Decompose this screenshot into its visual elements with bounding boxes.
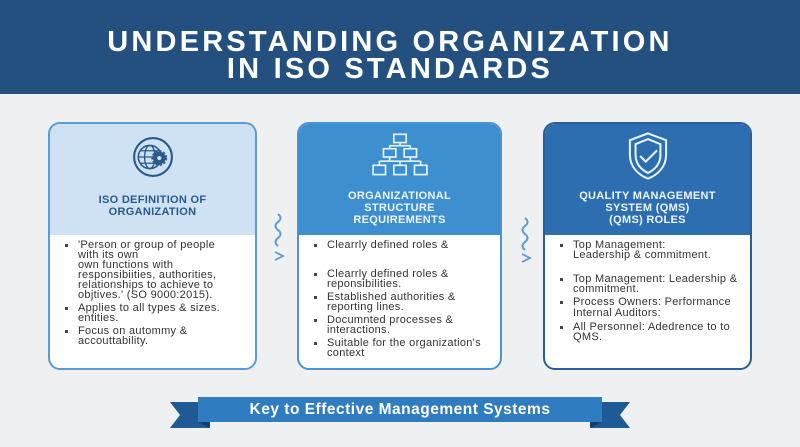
bullet list: structure: Established authorities & reporting lines. xyxy=(327,291,456,313)
bullet list: ISO definition: 'Person or group of people xyxy=(78,239,215,251)
icon: globe with gear xyxy=(133,137,173,177)
title xyxy=(107,26,673,85)
icon: org chart xyxy=(372,133,428,176)
header band xyxy=(0,0,800,94)
panel title: structure: REQUIREMENTS xyxy=(353,214,446,226)
panel: QMS roles xyxy=(543,122,752,370)
bullet list: structure: Clearrly defined roles & reponsibilities. xyxy=(327,268,449,290)
bullet list: QMS xyxy=(560,239,737,343)
bullet list: ISO definition xyxy=(65,239,220,347)
panel title: QMS: (QMS) ROLES xyxy=(609,214,686,226)
panel title: structure xyxy=(348,190,451,226)
bullet list: QMS: Process Owners: Performance xyxy=(573,296,731,308)
bullet list: QMS: All Personnel: Adedrence to to QMS. xyxy=(573,321,730,343)
panel: ISO definition xyxy=(48,122,257,370)
banner: key to effective management systems xyxy=(170,397,630,428)
bullet list: ISO definition: with its own xyxy=(78,249,138,261)
panel header: QMS xyxy=(545,124,750,235)
panel title: QMS: QUALITY MANAGEMENT xyxy=(579,190,716,202)
title: UNDERSTANDING ORGANIZATION xyxy=(107,26,673,58)
bullet list: structure: Documnted processes & interactions. xyxy=(327,314,453,336)
panel title: structure: STRUCTURE xyxy=(364,202,435,214)
panel title: structure: ORGANIZATIONAL xyxy=(348,190,451,202)
panel title: ISO definition: ORGANIZATION xyxy=(109,206,196,218)
panel: organizational structure xyxy=(297,122,502,370)
bullet list: structure xyxy=(314,239,481,359)
panel title: QMS xyxy=(579,190,716,226)
arrow: squiggle 1 xyxy=(274,213,285,261)
bullet list: ISO definition: Applies to all types & sizes. entities. xyxy=(78,302,220,324)
panel title: ISO definition: ISO DEFINITION OF xyxy=(99,194,206,206)
bullet list: ISO definition: own functions with responsibiities, authorities, relationships to achieve to objtives.' (SO 9000:2015). xyxy=(78,259,216,301)
bullet list: structure: Suitable for the organization's context xyxy=(327,337,481,359)
icon: shield check xyxy=(628,132,668,180)
bullet list: QMS: Top Management: xyxy=(573,239,666,251)
title: IN ISO STANDARDS xyxy=(227,53,553,85)
bullet list: ISO definition: Focus on autommy & accouttability. xyxy=(78,325,187,347)
panel header: ISO definition xyxy=(50,124,255,235)
bullet list: structure: Clearrly defined roles & xyxy=(327,239,449,251)
bullet list: QMS: Top Management: Leadership & commitment. xyxy=(573,273,737,295)
banner: key to effective management systems: Key to Effective Management Systems xyxy=(250,401,550,418)
panel title: QMS: SYSTEM (QMS) xyxy=(605,202,690,214)
bullet list: QMS: Internal Auditors: xyxy=(573,307,661,319)
arrow: squiggle 2 xyxy=(522,217,532,263)
panel title: ISO definition xyxy=(99,194,206,218)
bullet list: QMS: Leadership & commitment. xyxy=(573,249,711,261)
panel header: structure xyxy=(299,124,500,235)
